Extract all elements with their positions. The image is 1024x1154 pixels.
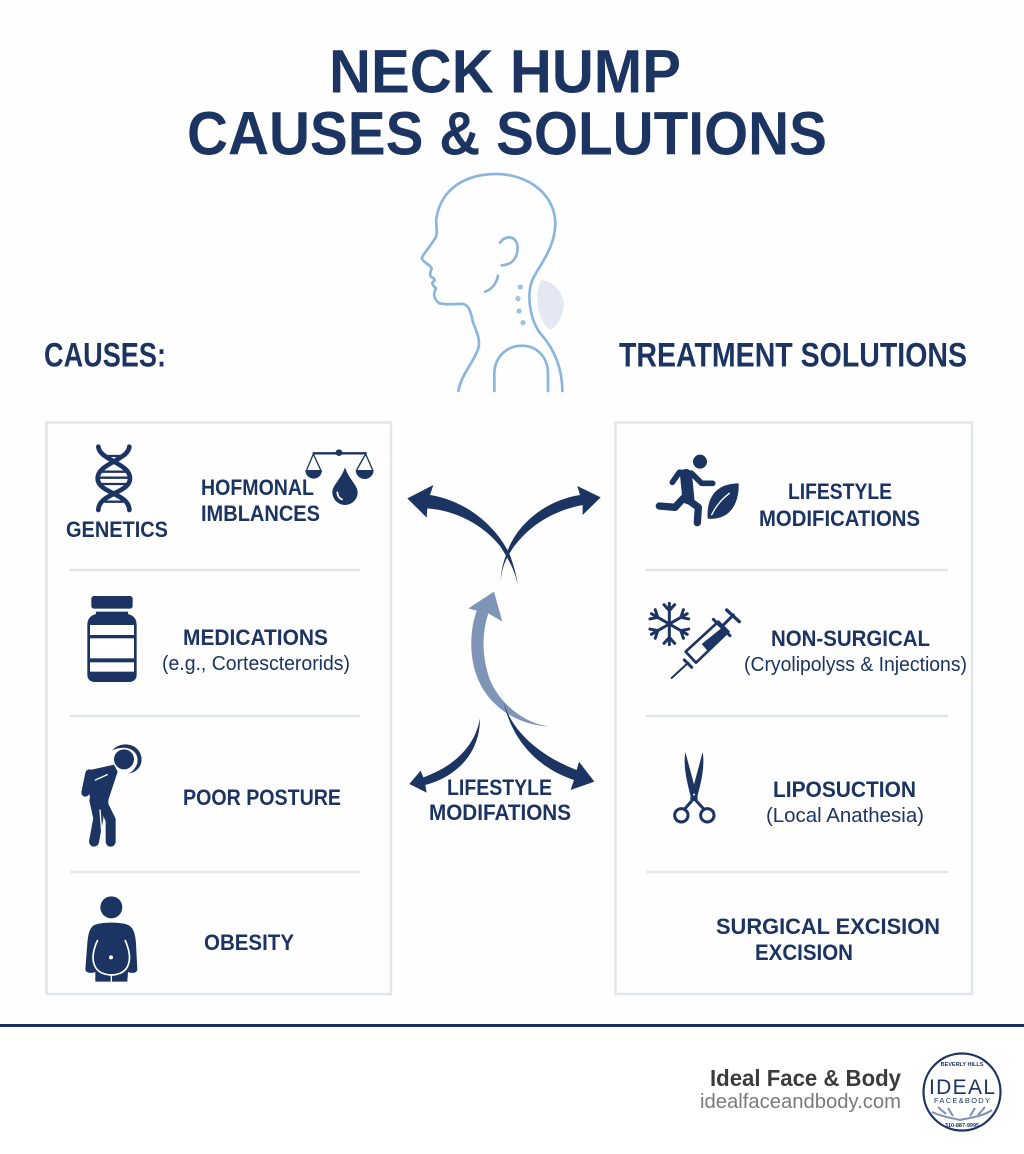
panel: treatment solutions — [616, 422, 972, 994]
arrow: bottom left — [409, 718, 480, 793]
label: non-surgical — [744, 626, 967, 676]
panel: causes — [46, 422, 391, 994]
website: idealfaceandbody.com — [700, 1091, 901, 1113]
logo badge: BEVERLY HILLS — [941, 1062, 984, 1068]
icon: syringe — [672, 610, 739, 678]
label: liposuction — [766, 777, 924, 827]
label: medications — [162, 625, 350, 675]
label: surgical excision — [716, 914, 940, 965]
label: poor posture: POOR POSTURE — [183, 785, 341, 810]
label: surgical excision: SURGICAL EXCISION — [716, 914, 940, 939]
arrow: top right — [501, 486, 601, 582]
logo badge: FACE&BODY — [934, 1096, 990, 1105]
label: non-surgical: (Cryolipolyss & Injections) — [744, 654, 967, 676]
icon: DNA — [98, 447, 130, 510]
icon: snowflake — [649, 603, 690, 645]
logo badge: IDEAL — [929, 1076, 995, 1099]
footer — [0, 1024, 1024, 1154]
title — [187, 37, 827, 168]
label: genetics: GENETICS — [66, 517, 168, 542]
label: obesity: OBESITY — [204, 930, 294, 955]
label: medications: MEDICATIONS — [183, 625, 328, 650]
brand name: Ideal Face & Body — [710, 1065, 901, 1091]
icon: scissors — [675, 752, 714, 822]
label: center lifestyle modifications — [429, 775, 571, 825]
label: hormonal imbalances: IMBLANCES — [201, 501, 320, 526]
title: CAUSES & SOLUTIONS — [187, 99, 827, 168]
arrow: top left — [407, 485, 518, 585]
title: NECK HUMP — [329, 37, 681, 106]
label: center lifestyle modifications: LIFESTYLE — [447, 775, 552, 800]
label: hormonal imbalances — [201, 475, 320, 526]
logo badge — [924, 1054, 1000, 1130]
label: non-surgical: NON-SURGICAL — [771, 626, 930, 651]
label: lifestyle modifications: LIFESTYLE — [788, 479, 892, 504]
arrow: bottom right — [502, 690, 594, 790]
icon: medication bottle — [87, 596, 137, 682]
icon: obesity — [85, 896, 137, 982]
label: surgical excision: EXCISION — [755, 940, 853, 965]
logo badge: 310-887-9995 — [945, 1123, 979, 1129]
label: liposuction: LIPOSUCTION — [773, 777, 916, 802]
label: lifestyle modifications — [759, 479, 920, 531]
label: center lifestyle modifications: MODIFATIONS — [429, 800, 571, 825]
label: medications: (e.g., Cortescterorids) — [162, 653, 350, 675]
label: lifestyle modifications: MODIFICATIONS — [759, 506, 920, 531]
illustration: head profile with neck hump — [422, 174, 564, 391]
icon: poor posture — [85, 744, 142, 842]
label: hormonal imbalances: HOFMONAL — [201, 475, 314, 500]
label: liposuction: (Local Anathesia) — [766, 805, 924, 827]
arrows: central diagram — [407, 485, 601, 793]
icon: scales and drop — [305, 449, 374, 505]
heading: causes: CAUSES: — [44, 336, 166, 374]
icon: runner and leaf — [659, 455, 739, 523]
arrow: light upward — [468, 592, 550, 727]
